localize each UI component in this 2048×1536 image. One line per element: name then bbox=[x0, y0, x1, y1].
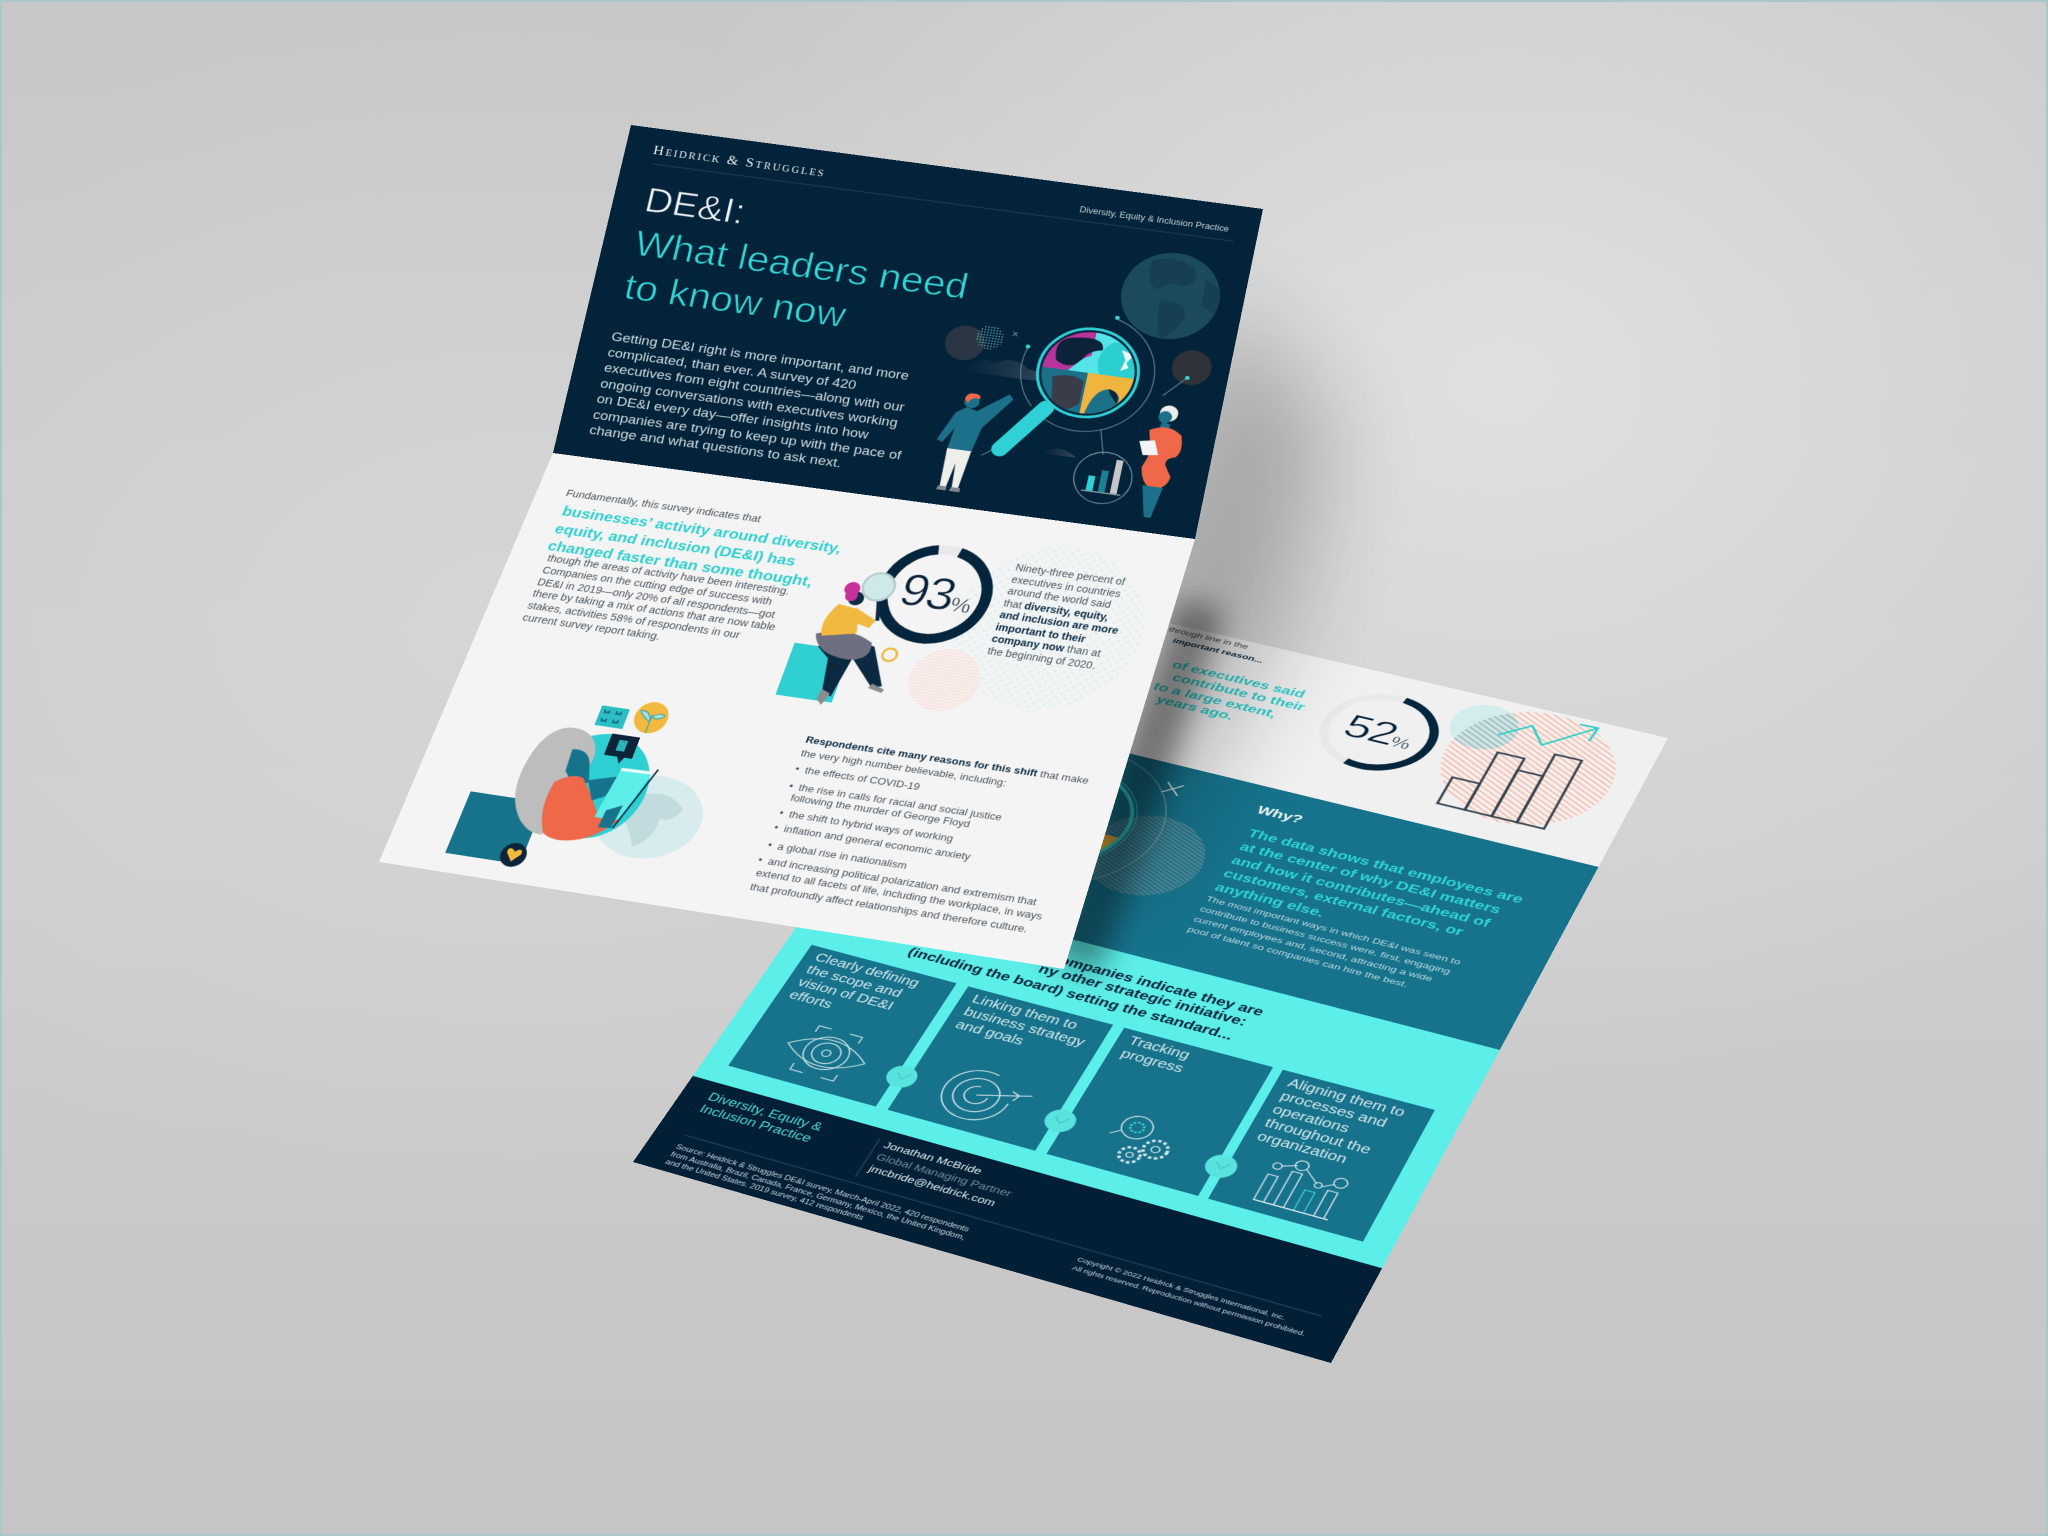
panel: front page body bbox=[379, 453, 1195, 969]
heading: why: Why? bbox=[1254, 804, 1306, 826]
text: ninety-three percent: around the world said bbox=[1006, 586, 1112, 610]
text: respondents cite reasons: • and increasing political polarization and extremism that bbox=[756, 854, 1038, 908]
icon: gears bbox=[1097, 1111, 1182, 1170]
text: body paragraph: though the areas of activity have been interesting. bbox=[545, 553, 791, 597]
card: linking to strategy: Linking them to bbox=[969, 992, 1080, 1032]
text: body paragraph: there by taking a mix of actions that are now table bbox=[531, 588, 777, 633]
card icons overlay bbox=[684, 1024, 1349, 1316]
card: tracking progress bbox=[1047, 1028, 1273, 1196]
icon: chevron connectors bbox=[880, 1063, 1243, 1181]
heading: setting the standard: ny other strategic initiative: bbox=[1036, 963, 1250, 1029]
text: respondents cite reasons: • the effects of COVID-19 bbox=[794, 763, 922, 792]
text: ninety-three percent: the beginning of 2020. bbox=[986, 645, 1097, 671]
label: practice name: Diversity, Equity & Inclusion Practice bbox=[1079, 205, 1230, 234]
footer: contact: jmcbride@heidrick.com bbox=[866, 1163, 998, 1209]
card: defining scope: the scope and bbox=[803, 963, 905, 1000]
title: What leaders need bbox=[631, 224, 972, 306]
card: tracking progress: progress bbox=[1118, 1047, 1186, 1076]
icon: eye bbox=[773, 1021, 879, 1086]
text: data shows: anything else. bbox=[1212, 881, 1327, 920]
heading: businesses activity: businesses’ activity around diversity, bbox=[560, 504, 844, 557]
text: most important ways: The most important ways in which DE&I was seen to bbox=[1204, 894, 1463, 966]
text: fundamentally lead-in: Fundamentally, this survey indicates that bbox=[564, 488, 763, 525]
text: intro paragraph: ongoing conversations with executives working bbox=[599, 376, 899, 430]
text: data shows: The data shows that employees are bbox=[1245, 827, 1526, 906]
heading: executives said: to a large extent, bbox=[1150, 680, 1279, 720]
card: aligning processes: processes and bbox=[1277, 1089, 1389, 1130]
footer: practice name: Inclusion Practice bbox=[697, 1102, 815, 1145]
stat: 52%: 52% bbox=[1337, 707, 1413, 752]
text: data shows: and how it contributes—ahead of bbox=[1229, 853, 1493, 930]
decorative dim circles bbox=[942, 318, 1215, 393]
card: aligning processes: throughout the bbox=[1262, 1116, 1374, 1157]
heading: setting the standard: (including the board) setting the standard... bbox=[905, 946, 1236, 1043]
footer: contact bbox=[866, 1140, 1014, 1209]
text: body paragraph: DE&I in 2019—only 20% of all respondents—got bbox=[536, 577, 777, 621]
icon: bar and line chart bbox=[1254, 1154, 1353, 1220]
text: respondents cite reasons: Respondents cite many reasons for this shift that make bbox=[804, 734, 1090, 786]
title: DE&I: bbox=[641, 181, 749, 231]
card: defining scope: efforts bbox=[786, 988, 835, 1011]
text: body paragraph: stakes, activities 58% of respondents in our bbox=[526, 600, 742, 641]
panel: front page header bbox=[553, 125, 1263, 539]
rule under logo bbox=[652, 164, 1233, 241]
heading: executives said: contribute to their bbox=[1170, 671, 1308, 713]
footer: copyright: Copyright © 2022 Heidrick & Struggles International, Inc. bbox=[1075, 1256, 1287, 1322]
text: ninety-three percent: that diversity, equity, bbox=[1002, 598, 1110, 622]
title: to know now bbox=[620, 267, 850, 335]
text: respondents cite reasons: • inflation and general economic anxiety bbox=[772, 822, 972, 862]
footer: source note: from Australia, Brazil, Canada, France, Germany, Mexico, the United Kingdom, bbox=[669, 1151, 967, 1242]
heading: businesses activity: equity, and inclusion (DE&I) has bbox=[552, 521, 798, 569]
icon: target bbox=[930, 1064, 1039, 1132]
icon: magnifying glass bbox=[990, 327, 1140, 457]
clouds bbox=[948, 354, 1095, 458]
text: respondents cite reasons: • the rise in calls for racial and social justice bbox=[787, 780, 1004, 823]
card: aligning processes: operations bbox=[1270, 1103, 1352, 1136]
footer: practice name: Diversity, Equity & bbox=[705, 1090, 825, 1133]
heading: businesses activity bbox=[545, 504, 844, 590]
illustration: man pointing bbox=[926, 386, 1014, 497]
footer: contact: Jonathan McBride bbox=[881, 1140, 984, 1177]
header illustration bbox=[652, 164, 1234, 518]
text: respondents cite reasons: extend to all facets of life, including the workplace, in ways bbox=[754, 867, 1044, 922]
title bbox=[620, 181, 972, 335]
text: intro paragraph: on DE&I every day—offer insights into how bbox=[595, 392, 870, 442]
section: teal why band bbox=[831, 709, 1598, 1050]
illustration: woman with tablet and globe bbox=[444, 682, 742, 892]
text: respondents cite reasons: • a global rise in nationalism bbox=[766, 839, 909, 871]
card: aligning processes: organization bbox=[1254, 1129, 1350, 1166]
card: tracking progress: Tracking bbox=[1126, 1034, 1193, 1062]
text: ninety-three percent: company now than at bbox=[990, 633, 1102, 659]
text: respondents cite reasons bbox=[748, 734, 1090, 935]
text: ninety-three percent: and inclusion are more bbox=[998, 610, 1120, 636]
pink hatched circle bbox=[899, 645, 989, 716]
footer: copyright: All rights reserved. Reproduction without permission prohibited. bbox=[1070, 1265, 1307, 1338]
text: intro paragraph: Getting DE&I right is more important, and more bbox=[610, 330, 910, 383]
text: body paragraph: current survey report taking. bbox=[521, 612, 662, 643]
footer rules bbox=[685, 1092, 1347, 1316]
text: intro paragraph: companies are trying to keep up with the pace of bbox=[592, 407, 903, 463]
heading: executives said bbox=[1150, 659, 1308, 722]
donut: 52 percent bbox=[1298, 681, 1459, 784]
text: important reason: important reason... bbox=[1171, 637, 1265, 664]
footer: source note: Source: Heidrick & Struggles DE&I survey, March-April 2022, 420 respondents bbox=[674, 1143, 971, 1234]
text: through line lead-in: through line in the bbox=[1167, 625, 1250, 651]
text: data shows: customers, external factors, or bbox=[1220, 867, 1466, 939]
heading: executives said: of executives said bbox=[1169, 659, 1308, 700]
heading: executives said: years ago. bbox=[1153, 693, 1236, 722]
text: body paragraph bbox=[521, 548, 990, 643]
text: ninety-three percent: executives in countries bbox=[1010, 574, 1122, 599]
text: most important ways: pool of talent so companies can hire the best. bbox=[1185, 925, 1410, 989]
card: linking to strategy: and goals bbox=[952, 1018, 1027, 1048]
icon: yellow ring bbox=[881, 648, 899, 662]
footer: source note: and the United States. 2019 survey, 412 respondents bbox=[663, 1158, 865, 1222]
back page graphics bbox=[1091, 698, 1616, 896]
text: intro paragraph: change and what questions to ask next. bbox=[588, 423, 843, 471]
text: body paragraph: Companies on the cutting edge of success with bbox=[540, 565, 774, 608]
card: linking to strategy: business strategy bbox=[961, 1005, 1088, 1049]
text: most important ways: current employees and, second, attracting a wide bbox=[1192, 915, 1434, 983]
footer: contact: Global Managing Partner bbox=[874, 1152, 1014, 1199]
icon: globe bbox=[1120, 252, 1220, 340]
text: ninety-three percent: Ninety-three percent of bbox=[1014, 562, 1127, 587]
text: data shows: at the center of why DE&I matters bbox=[1237, 840, 1504, 916]
panel: back page bbox=[633, 591, 1668, 1363]
icon: small bar chart in circle bbox=[1069, 449, 1137, 507]
illustration: seated woman with magnifier bbox=[774, 565, 923, 713]
orbit arcs and dots bbox=[981, 302, 1200, 480]
text: ninety-three percent bbox=[916, 548, 1127, 671]
section: bright standard band bbox=[693, 877, 1500, 1268]
heading: setting the standard: companies indicate they are bbox=[1047, 952, 1266, 1019]
illustrations: front body bbox=[445, 544, 1146, 868]
illustration: woman with tablet bbox=[1124, 403, 1190, 520]
heading: businesses activity: changed faster than some thought, bbox=[545, 538, 815, 590]
text: respondents cite reasons: following the murder of George Floyd bbox=[789, 792, 972, 830]
text: intro paragraph: executives from eight countries—along with our bbox=[603, 361, 906, 415]
text: data shows bbox=[1212, 827, 1526, 939]
stat: 93%: 93% bbox=[893, 564, 973, 620]
card: aligning processes bbox=[1208, 1070, 1435, 1242]
dotted circle bbox=[929, 535, 1167, 722]
text: ninety-three percent: important to their bbox=[994, 621, 1087, 644]
card: defining scope bbox=[728, 945, 957, 1107]
text: intro paragraph bbox=[588, 330, 910, 471]
section: navy footer band bbox=[633, 1076, 1382, 1363]
card: linking to strategy bbox=[888, 986, 1113, 1151]
chart illustration: rising bars and arrow bbox=[1435, 705, 1616, 830]
text: intro paragraph: complicated, than ever. A survey of 420 bbox=[606, 345, 858, 392]
logo: Heidrick & Struggles bbox=[652, 144, 827, 180]
donut: 93 percent bbox=[856, 534, 1012, 655]
card: defining scope: vision of DE&I bbox=[795, 976, 896, 1013]
text: respondents cite reasons: that profoundly affect relationships and therefore culture. bbox=[748, 881, 1029, 935]
card: aligning processes: Aligning them to bbox=[1285, 1076, 1408, 1120]
text: respondents cite reasons: • the shift to hybrid ways of working bbox=[778, 807, 955, 844]
card: defining scope: Clearly defining bbox=[812, 951, 922, 990]
text: most important ways: contribute to business success were, first, engaging bbox=[1198, 904, 1453, 976]
text: respondents cite reasons: the very high number believable, including: bbox=[799, 747, 1008, 788]
magnifier remnant and hatched circle bbox=[1091, 758, 1206, 896]
